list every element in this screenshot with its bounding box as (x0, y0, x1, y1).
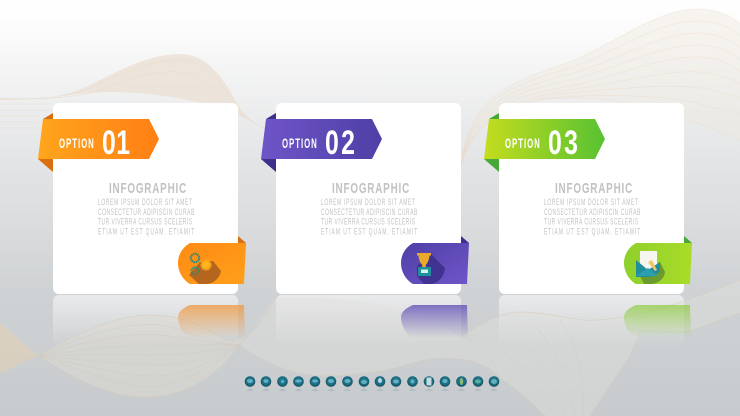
wave: bottom (0, 280, 740, 416)
text block: ETIAM UT EST QUAM. ETIAMIT (98, 226, 195, 237)
reflection of tab (178, 305, 245, 338)
wave: top left (0, 54, 275, 132)
panel: option 01 (38, 103, 246, 338)
card (499, 103, 684, 294)
reflection of tab (624, 305, 691, 338)
card reflections (53, 295, 684, 347)
panel: option 03 (484, 103, 692, 338)
text block (98, 180, 195, 237)
panel: option 02 (261, 103, 469, 338)
reflection of tab (401, 305, 468, 338)
text block: LOREM IPSUM DOLOR SIT AMET (321, 196, 415, 207)
text block: TUR VIVERRA CURSUS SCELERIS (321, 216, 415, 227)
ribbon: option 01: 01 (102, 124, 130, 162)
text block (321, 180, 418, 237)
card (276, 103, 461, 294)
text block: CONSECTETUR ADIPISCIN CURAB (321, 206, 417, 217)
text block: LOREM IPSUM DOLOR SIT AMET (544, 196, 638, 207)
ribbon: option 03: 03 (548, 124, 578, 162)
tab with trophy icon (401, 236, 469, 284)
tab with gears icon (178, 236, 246, 284)
text block: CONSECTETUR ADIPISCIN CURAB (544, 206, 640, 217)
ribbon: option 02 (261, 113, 382, 172)
ribbon: option 02: OPTION (282, 137, 317, 152)
text block: TUR VIVERRA CURSUS SCELERIS (98, 216, 192, 227)
icon row (245, 376, 499, 391)
text block: LOREM IPSUM DOLOR SIT AMET (98, 196, 192, 207)
ribbon: option 01 (38, 113, 159, 172)
ribbon: option 01: OPTION (59, 137, 94, 152)
text block: INFOGRAPHIC (332, 180, 409, 197)
text block: ETIAM UT EST QUAM. ETIAMIT (321, 226, 418, 237)
ribbon: option 02: 02 (325, 124, 355, 162)
card (53, 103, 238, 294)
wave: top right (461, 9, 740, 165)
tab with envelope icon (624, 236, 692, 284)
text block: TUR VIVERRA CURSUS SCELERIS (544, 216, 638, 227)
text block: CONSECTETUR ADIPISCIN CURAB (98, 206, 194, 217)
text block: INFOGRAPHIC (555, 180, 632, 197)
ribbon: option 03 (484, 113, 605, 172)
ribbon: option 03: OPTION (505, 137, 540, 152)
text block (544, 180, 641, 237)
text block: INFOGRAPHIC (109, 180, 186, 197)
text block: ETIAM UT EST QUAM. ETIAMIT (544, 226, 641, 237)
